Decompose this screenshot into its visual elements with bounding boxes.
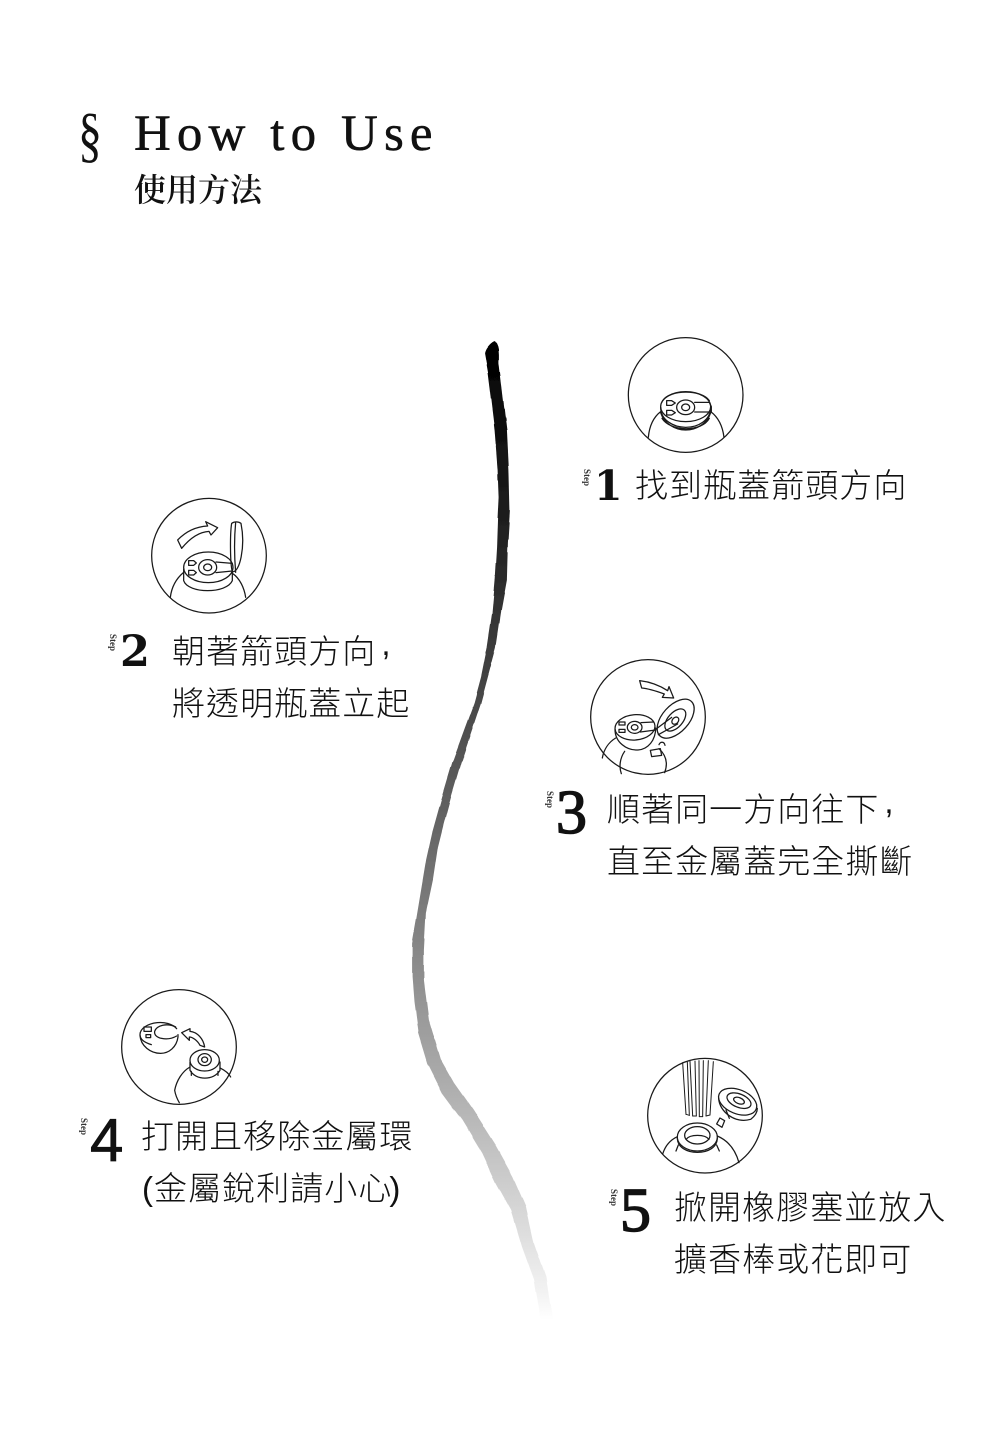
step label: Step [545,791,555,808]
icon: push cap down [591,660,705,774]
step 5: 擴香棒或花即可 [674,1241,912,1278]
title [78,100,439,208]
step text: 朝著箭頭方向 [172,633,376,670]
step label: Step [609,1189,619,1206]
subheading: 使用方法 [134,172,264,208]
step 3 [545,660,913,880]
icon: lift clear cap [152,498,266,613]
icon: insert sticks [648,1058,762,1173]
step number: 5 [620,1177,651,1245]
brush stroke timeline [413,342,552,1320]
step number: 4 [90,1107,123,1174]
step 2: 將透明瓶蓋立起 [172,685,410,722]
step label: Step [79,1118,89,1135]
step text: 找到瓶蓋箭頭方向 [635,467,907,504]
step text: 打開且移除金屬環 [141,1118,413,1155]
step text: 掀開橡膠塞並放入 [674,1189,946,1226]
step number: 3 [556,779,587,847]
step 1 [582,338,907,510]
step 3: 直至金屬蓋完全撕斷 [607,843,913,880]
step label: Step [108,634,118,651]
step 2 [108,498,410,722]
step text: , [884,783,895,820]
step text: , [381,625,392,662]
step 4 [79,990,413,1207]
icon: bottle cap arrows [628,338,743,452]
step label: Step [582,469,592,486]
step 4: (金屬銳利請小心) [142,1170,401,1207]
icon: remove metal ring [122,990,236,1104]
step number: 2 [120,627,150,677]
step 5 [609,1058,946,1278]
step text: 順著同一方向往下 [607,791,879,828]
step number: 1 [594,462,623,510]
heading: How to Use: How to Use [134,106,439,162]
icon: section sign: § [78,100,102,168]
